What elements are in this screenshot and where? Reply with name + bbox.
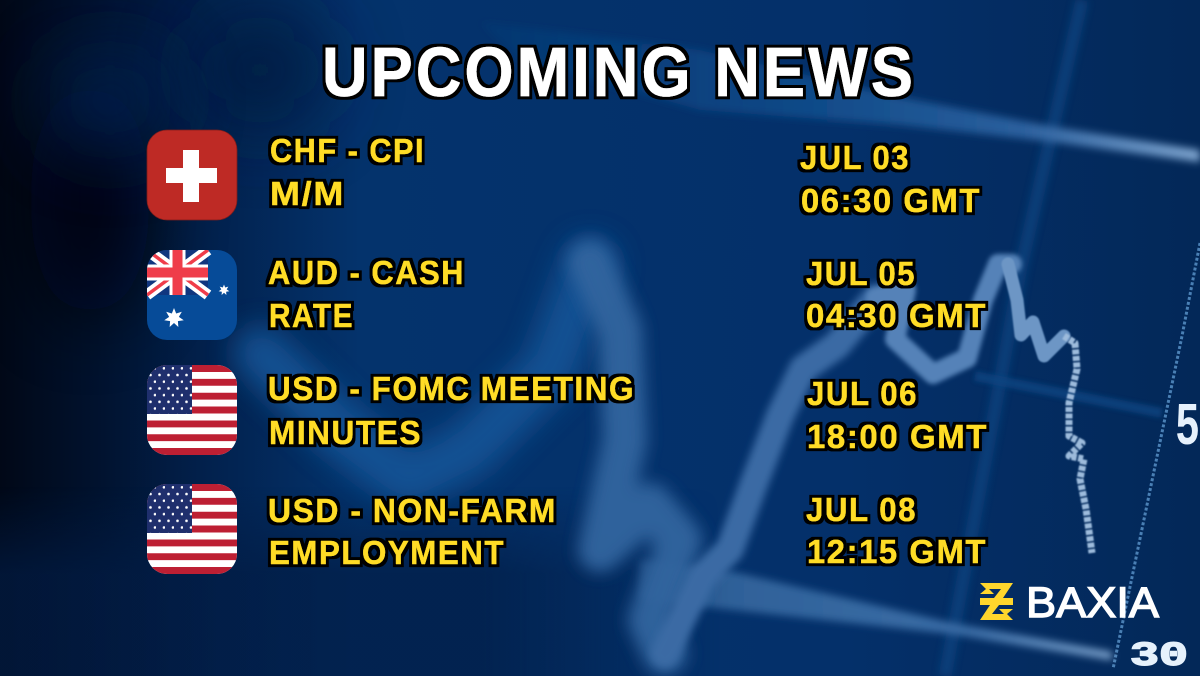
- event: USD non-farm: [268, 492, 557, 571]
- icon: Australian flag: [147, 250, 237, 340]
- event: CHF CPI: CHF - CPI: [270, 132, 425, 169]
- date: JUL 03: 06:30 GMT: [801, 182, 981, 219]
- title: UPCOMING NEWS: [322, 33, 916, 111]
- event: USD FOMC: [268, 370, 635, 451]
- date: JUL 06: JUL 06: [807, 375, 918, 412]
- event: USD non-farm: USD - NON-FARM: [268, 492, 557, 529]
- date: JUL 08: [806, 491, 987, 570]
- event: USD FOMC: MINUTES: [269, 414, 422, 451]
- date: JUL 05: JUL 05: [806, 255, 916, 292]
- event: CHF CPI: [270, 132, 425, 212]
- event: CHF CPI: M/M: [270, 175, 345, 212]
- date: JUL 08: JUL 08: [806, 491, 917, 528]
- date: JUL 08: 12:15 GMT: [807, 533, 987, 570]
- date: JUL 06: 18:00 GMT: [807, 418, 988, 455]
- date: JUL 06: [807, 375, 988, 455]
- event: AUD cash rate: RATE: [269, 297, 354, 334]
- date: JUL 05: [806, 255, 987, 334]
- icon: US flag: [147, 484, 237, 574]
- date: JUL 03: JUL 03: [800, 139, 910, 176]
- icon: Swiss flag: [147, 130, 237, 220]
- background: blurred stock chart: 30: [1130, 638, 1188, 676]
- event: USD non-farm: EMPLOYMENT: [269, 534, 505, 571]
- icon: logo mark: [980, 583, 1013, 620]
- date: JUL 05: 04:30 GMT: [806, 297, 987, 334]
- icon: US flag: [147, 365, 237, 455]
- event: USD FOMC: USD - FOMC MEETING: [268, 370, 635, 407]
- event: AUD cash rate: AUD - CASH: [268, 254, 465, 291]
- event: AUD cash rate: [268, 254, 465, 334]
- logo: BAXIA: BAXIA: [1026, 579, 1159, 627]
- date: JUL 03: [800, 139, 981, 219]
